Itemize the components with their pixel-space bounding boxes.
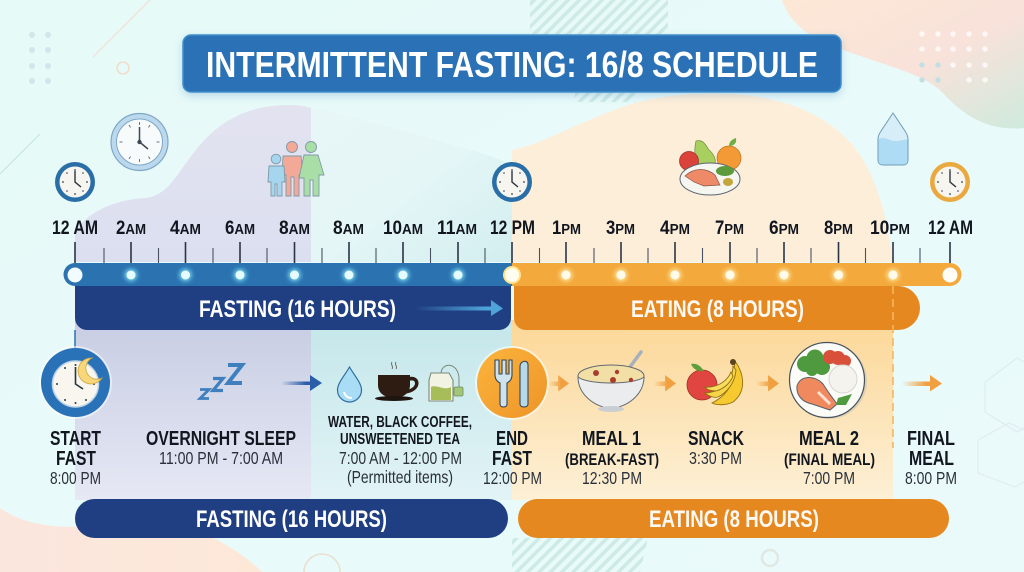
label: overnight sleep: 11:00 PM - 7:00 AM xyxy=(159,448,283,468)
panel: eating upper backdrop xyxy=(512,93,893,262)
arrow: sleep to permitted items xyxy=(281,375,322,391)
label: meal 1: MEAL 1 xyxy=(582,428,641,450)
title banner xyxy=(183,35,841,92)
step: snack xyxy=(687,359,744,468)
label: meal 1 xyxy=(565,428,659,488)
hour labels: 1PM xyxy=(552,218,581,239)
step: overnight sleep xyxy=(146,365,322,468)
label: permitted items: 7:00 AM - 12:00 PM xyxy=(339,448,462,468)
label: permitted items: WATER, BLACK COFFEE, xyxy=(328,414,472,431)
hour labels: 8AM xyxy=(333,218,364,239)
icon: midnight clock xyxy=(55,162,95,202)
icon: oatmeal bowl xyxy=(578,352,644,412)
label: snack: 3:30 PM xyxy=(689,448,742,468)
label: meal 1: 12:30 PM xyxy=(582,468,642,488)
label: permitted items: (Permitted items) xyxy=(347,467,453,487)
icon: large wall clock xyxy=(111,114,168,170)
label: end fast: 12:00 PM xyxy=(483,468,542,488)
icon: fork and knife xyxy=(475,346,549,420)
step: final meal: MEAL xyxy=(909,448,954,470)
band: fasting 16 hours (top): FASTING (16 HOURS) xyxy=(199,296,396,323)
step: start fast xyxy=(39,346,112,488)
step: final meal: FINAL xyxy=(907,428,955,450)
arrow: fasting direction xyxy=(415,300,503,316)
timeline bar: fasting xyxy=(64,263,512,286)
hour labels: 7PM xyxy=(715,218,744,239)
hour labels: 6PM xyxy=(769,218,799,239)
step: meal 2 xyxy=(784,342,875,488)
label: meal 2 xyxy=(784,428,875,488)
band: eating 8 hours (top) xyxy=(514,286,920,330)
label: permitted items xyxy=(328,414,472,487)
fasting window start marker xyxy=(74,330,76,348)
hour labels: 3PM xyxy=(606,218,635,239)
hour labels: 4PM xyxy=(660,218,690,239)
step: permitted items xyxy=(328,362,472,487)
label: end fast: FAST xyxy=(492,448,532,470)
band: eating 8 hours (bottom): EATING (8 HOURS) xyxy=(649,506,819,533)
band: fasting 16 hours (bottom): FASTING (16 HOURS) xyxy=(196,506,387,533)
label: snack xyxy=(688,428,744,468)
icon: fruit and salmon plate xyxy=(680,138,741,195)
hour labels: 12 AM xyxy=(52,218,98,239)
icon: tea bag xyxy=(429,365,463,401)
icon: salmon dinner plate xyxy=(790,342,867,419)
label: meal 1: (BREAK-FAST) xyxy=(565,450,659,469)
panel: fasting lower backdrop xyxy=(75,320,512,500)
label: start fast: START xyxy=(50,428,101,450)
step: meal 1 xyxy=(565,352,659,488)
label: meal 2: (FINAL MEAL) xyxy=(784,450,875,469)
hour labels: 8AM xyxy=(279,218,310,239)
hour labels: 12 AM xyxy=(928,218,973,239)
tick marks xyxy=(75,242,950,263)
icon: sleeping zzz xyxy=(200,365,242,398)
label: overnight sleep: OVERNIGHT SLEEP xyxy=(146,428,296,450)
label: end fast xyxy=(483,428,542,488)
label: overnight sleep xyxy=(146,428,296,468)
hour labels: 12 PM xyxy=(490,218,535,239)
icon: apple and banana xyxy=(687,359,743,405)
icon: water drop xyxy=(338,367,362,402)
hour labels: 4AM xyxy=(170,218,201,239)
label: start fast: FAST xyxy=(56,448,96,470)
icon: black coffee xyxy=(375,362,417,401)
hour labels: 10PM xyxy=(870,218,910,239)
arrow: toward final meal xyxy=(902,375,942,392)
step: final meal: 8:00 PM xyxy=(905,468,957,488)
label: start fast: 8:00 PM xyxy=(50,468,101,488)
hour labels: 11AM xyxy=(437,218,477,239)
timeline bar: eating xyxy=(503,263,962,286)
band: eating 8 hours (top): EATING (8 HOURS) xyxy=(631,296,804,323)
hour labels: 8PM xyxy=(824,218,853,239)
label: start fast xyxy=(50,428,101,488)
label: meal 2: MEAL 2 xyxy=(799,428,859,450)
hour labels: 2AM xyxy=(116,218,146,239)
label: snack: SNACK xyxy=(688,428,744,450)
band: fasting 16 hours (top) xyxy=(75,286,511,330)
panel: eating lower backdrop xyxy=(512,320,893,500)
hour labels: 6AM xyxy=(225,218,255,239)
band: eating 8 hours (bottom) xyxy=(518,499,949,538)
icon: clock with moon xyxy=(39,346,112,419)
icon: end of day clock xyxy=(930,162,970,202)
title banner: INTERMITTENT FASTING: 16/8 SCHEDULE xyxy=(206,44,818,85)
label: permitted items: UNSWEETENED TEA xyxy=(340,431,460,448)
label: meal 2: 7:00 PM xyxy=(803,468,855,488)
step: final meal xyxy=(905,428,957,488)
icon: noon clock xyxy=(492,162,532,202)
icon: family xyxy=(268,142,324,196)
arrow: end fast to meal 1 xyxy=(549,375,569,392)
panel: fasting upper backdrop xyxy=(75,105,512,262)
arrow: snack to meal 2 xyxy=(756,375,779,392)
icon: water bottle xyxy=(878,113,908,165)
hour labels xyxy=(52,218,973,239)
arrow: meal 1 to snack xyxy=(654,375,676,392)
hour labels: 10AM xyxy=(383,218,423,239)
label: end fast: END xyxy=(496,428,528,450)
eating window end marker xyxy=(892,286,894,448)
step: end fast xyxy=(475,346,549,488)
band: fasting 16 hours (bottom) xyxy=(75,499,508,538)
